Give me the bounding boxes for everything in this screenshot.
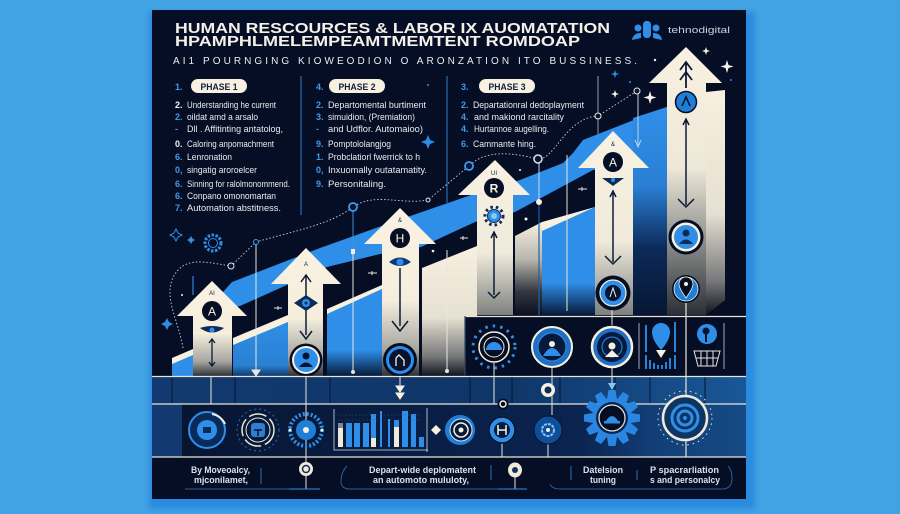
phase 3 badge: PHASE 3 [488, 82, 526, 92]
phase 2 list: Personitaling. [328, 179, 386, 190]
phase 1 list: Conpano omonomartan [187, 191, 276, 202]
phase 1 badge: PHASE 1 [200, 82, 238, 92]
caption medallion [508, 462, 522, 478]
badge chevron [676, 92, 696, 112]
rising blue band [205, 107, 667, 312]
step 4 [422, 246, 477, 376]
bottom icon: spiral target [658, 391, 712, 445]
connector node [498, 398, 508, 410]
panel: phase 1 [175, 79, 290, 214]
medallion: person [668, 220, 704, 254]
phase 2 list: Probclatiorl fwerrick to h [328, 152, 420, 163]
badge A [603, 152, 623, 172]
phase 1 list: 6. [175, 152, 183, 162]
step 3 [327, 289, 382, 376]
phase 1 list: oildat amd a arsalo [187, 112, 258, 123]
phase 2 list: Inxuomally outatamatity. [328, 165, 427, 176]
phase 2 badge: PHASE 2 [338, 82, 376, 92]
dotted roadmap path [170, 91, 637, 348]
horizontal rails [152, 316, 746, 457]
title: HUMAN RESCOURCES & LABOR IX AUOMATATION [175, 20, 610, 37]
arrow line [605, 191, 621, 264]
phase 2 list: simuidion, (Premiation) [328, 112, 415, 123]
caption: personalisation: P spacrarliation [650, 465, 719, 475]
phase 2 list: - [316, 124, 319, 134]
shelf icon: bulb and bars [639, 322, 675, 369]
shelf icon: bulb and cart [694, 323, 724, 369]
phase 3 list: 6. [461, 139, 469, 149]
phase 1 list: 0. [175, 139, 183, 149]
chevrons on band [396, 386, 404, 399]
panel shadow [149, 12, 755, 509]
panel: phase 2 [316, 79, 427, 190]
phase 2 badge [316, 79, 385, 93]
caption: personalisation [650, 465, 720, 485]
phase 1 list: 7. [175, 203, 183, 213]
phase 2 list: 9. [316, 139, 324, 149]
phase 2 list: Departomental burtiment [328, 100, 426, 111]
phase 3 list: Departationral dedoplayment [473, 100, 584, 111]
step 7 [706, 90, 725, 315]
phase 1 list: Lenronation [187, 152, 232, 163]
arrow 6 [649, 47, 722, 315]
shelf icon: circle 2 [532, 327, 572, 367]
eye icon [200, 326, 224, 332]
bar chart [334, 408, 428, 452]
shelf icon: circle 3 [592, 327, 632, 367]
phase 2 list: and Udflor. Automaioo) [328, 124, 423, 135]
phase 3 list: Hurtannoe augelling. [474, 124, 549, 135]
phase 1 list: 6. [175, 191, 183, 201]
phase 2 list: 9. [316, 179, 324, 189]
phase 3 list: 4. [461, 124, 469, 134]
caption: department-wide deployment: Depart-wide deplomatent [369, 465, 476, 475]
caption row background [152, 457, 746, 499]
double arrow [488, 232, 500, 298]
phase 3 list: 2. [461, 100, 469, 110]
step 2 [233, 322, 288, 376]
small plane marks [274, 187, 587, 310]
logo: technodigital [632, 21, 730, 40]
vertical arrow [300, 275, 312, 339]
phase 1 badge [175, 79, 247, 93]
medallion: person [290, 344, 322, 376]
caption: by monopoly [191, 465, 250, 485]
caption: data tuning [583, 465, 623, 485]
caption: department-wide deployment [369, 465, 476, 485]
long double arrow [678, 119, 694, 207]
badge R: R [490, 182, 499, 196]
phase 2 list: 2. [316, 100, 324, 110]
blue timeline band [152, 376, 746, 404]
gear icon [485, 207, 503, 225]
connector node [541, 383, 555, 397]
phase 1 list: singatig aroroelcer [187, 165, 257, 176]
title: HPAMPHLMELEMPEAMTMEMTENT ROMDOAP [175, 33, 580, 50]
phase 3 list: 4. [461, 112, 469, 122]
arrow 3 [364, 208, 436, 377]
logo: technodigital: tehnodigital [668, 25, 730, 35]
bottom icon: H circle [489, 417, 515, 443]
phase 1 list: Sinning for ralolmonommend. [187, 179, 290, 190]
vertical marker lines [193, 91, 641, 376]
icon: gear [205, 235, 221, 251]
phase 2 badge: 4. [316, 82, 324, 92]
badge R [484, 178, 504, 198]
caption: personalisation: s and personalcy [650, 475, 720, 485]
label UI: UI [491, 171, 497, 177]
phase 1 list: Dll . Affitinting antatolog, [187, 124, 283, 135]
label A: A [304, 262, 308, 268]
phase 1 list: 6. [175, 179, 183, 189]
phase 3 list [461, 100, 584, 150]
step 1 [172, 353, 193, 376]
title [175, 20, 610, 50]
vertical arrow [392, 268, 408, 331]
stepped growth bars [172, 90, 725, 376]
phase 1 list: Automation abstitness. [187, 203, 281, 214]
bottom icon: concentric ring [237, 409, 279, 451]
subtitle: AI1 POURNGING KIOWEODION O ARONZATION ITO BUSSINESS. [173, 56, 637, 67]
shelf icon: circle 1 [473, 326, 515, 368]
badge H [390, 228, 410, 248]
icon: map pin [672, 275, 700, 303]
caption: data tuning: tuning [590, 475, 616, 485]
eye icon [602, 178, 624, 186]
caption: by monopoly: mjconilamet, [194, 475, 248, 485]
badge H: H [396, 232, 404, 246]
phase 2 list: 1. [316, 152, 324, 162]
phase 3 list: Cammante hing. [473, 139, 536, 150]
phase 1 list: Caloring anpomachment [187, 139, 274, 150]
panel: phase 3 [461, 79, 584, 150]
eye icon [294, 295, 318, 311]
bottom icon: sunburst gear [584, 390, 640, 446]
double up arrows [680, 62, 692, 88]
phase 3 list: and makiond rarcitality [474, 112, 564, 123]
phase 1 badge: 1. [175, 82, 183, 92]
arrow 5 [578, 131, 649, 315]
icon row background [152, 404, 746, 457]
phase 1 list [175, 100, 290, 214]
arrow 4 [458, 160, 530, 315]
medallion: A [596, 276, 630, 310]
caption underlines and brackets [185, 465, 732, 489]
phase 1 list: - [175, 124, 178, 134]
phase 1 list: 0, [175, 165, 183, 175]
bottom icon: target [445, 415, 475, 445]
phase 2 list [316, 100, 427, 190]
navy column under band [633, 107, 667, 315]
shelf row background [465, 316, 746, 376]
label AI: AI [209, 291, 215, 297]
arrow into gear [608, 383, 616, 390]
phase 2 list: Pomptololangjog [328, 139, 391, 150]
bottom icon: gear circle [534, 416, 562, 444]
path nodes [228, 88, 640, 269]
caption: data tuning: Datelsion [583, 465, 623, 475]
phase 2 list: 0, [316, 165, 324, 175]
badge A: A [609, 156, 617, 170]
sparkles [161, 47, 734, 330]
phase 2 list: 3. [316, 112, 324, 122]
phase 1 list: 2. [175, 112, 183, 122]
phase 1 list: 2. [175, 100, 183, 110]
connector lines [306, 303, 686, 489]
medallion: H arrow [383, 343, 417, 377]
main dark panel [152, 10, 746, 499]
column dividers [301, 76, 598, 215]
phase 3 badge: 3. [461, 82, 469, 92]
caption medallion [299, 462, 313, 476]
bottom icon: ring badge [189, 412, 225, 448]
arrow 2 [271, 248, 341, 376]
phase 3 badge [461, 79, 535, 93]
double arrow [209, 339, 215, 366]
label: & [611, 142, 615, 148]
phase 1 list: Understanding he current [187, 100, 276, 111]
label: & [398, 218, 402, 224]
badge A: A [208, 304, 216, 318]
arrow 1 [177, 281, 247, 376]
caption: by monopoly: By Moveoalcy, [191, 465, 250, 475]
caption: department-wide deployment: an automoto mululoty, [373, 475, 469, 485]
step 5 [515, 222, 542, 315]
eye icon [389, 258, 411, 266]
bottom icon: rayed circle [288, 414, 324, 446]
diamond marker [431, 425, 441, 435]
